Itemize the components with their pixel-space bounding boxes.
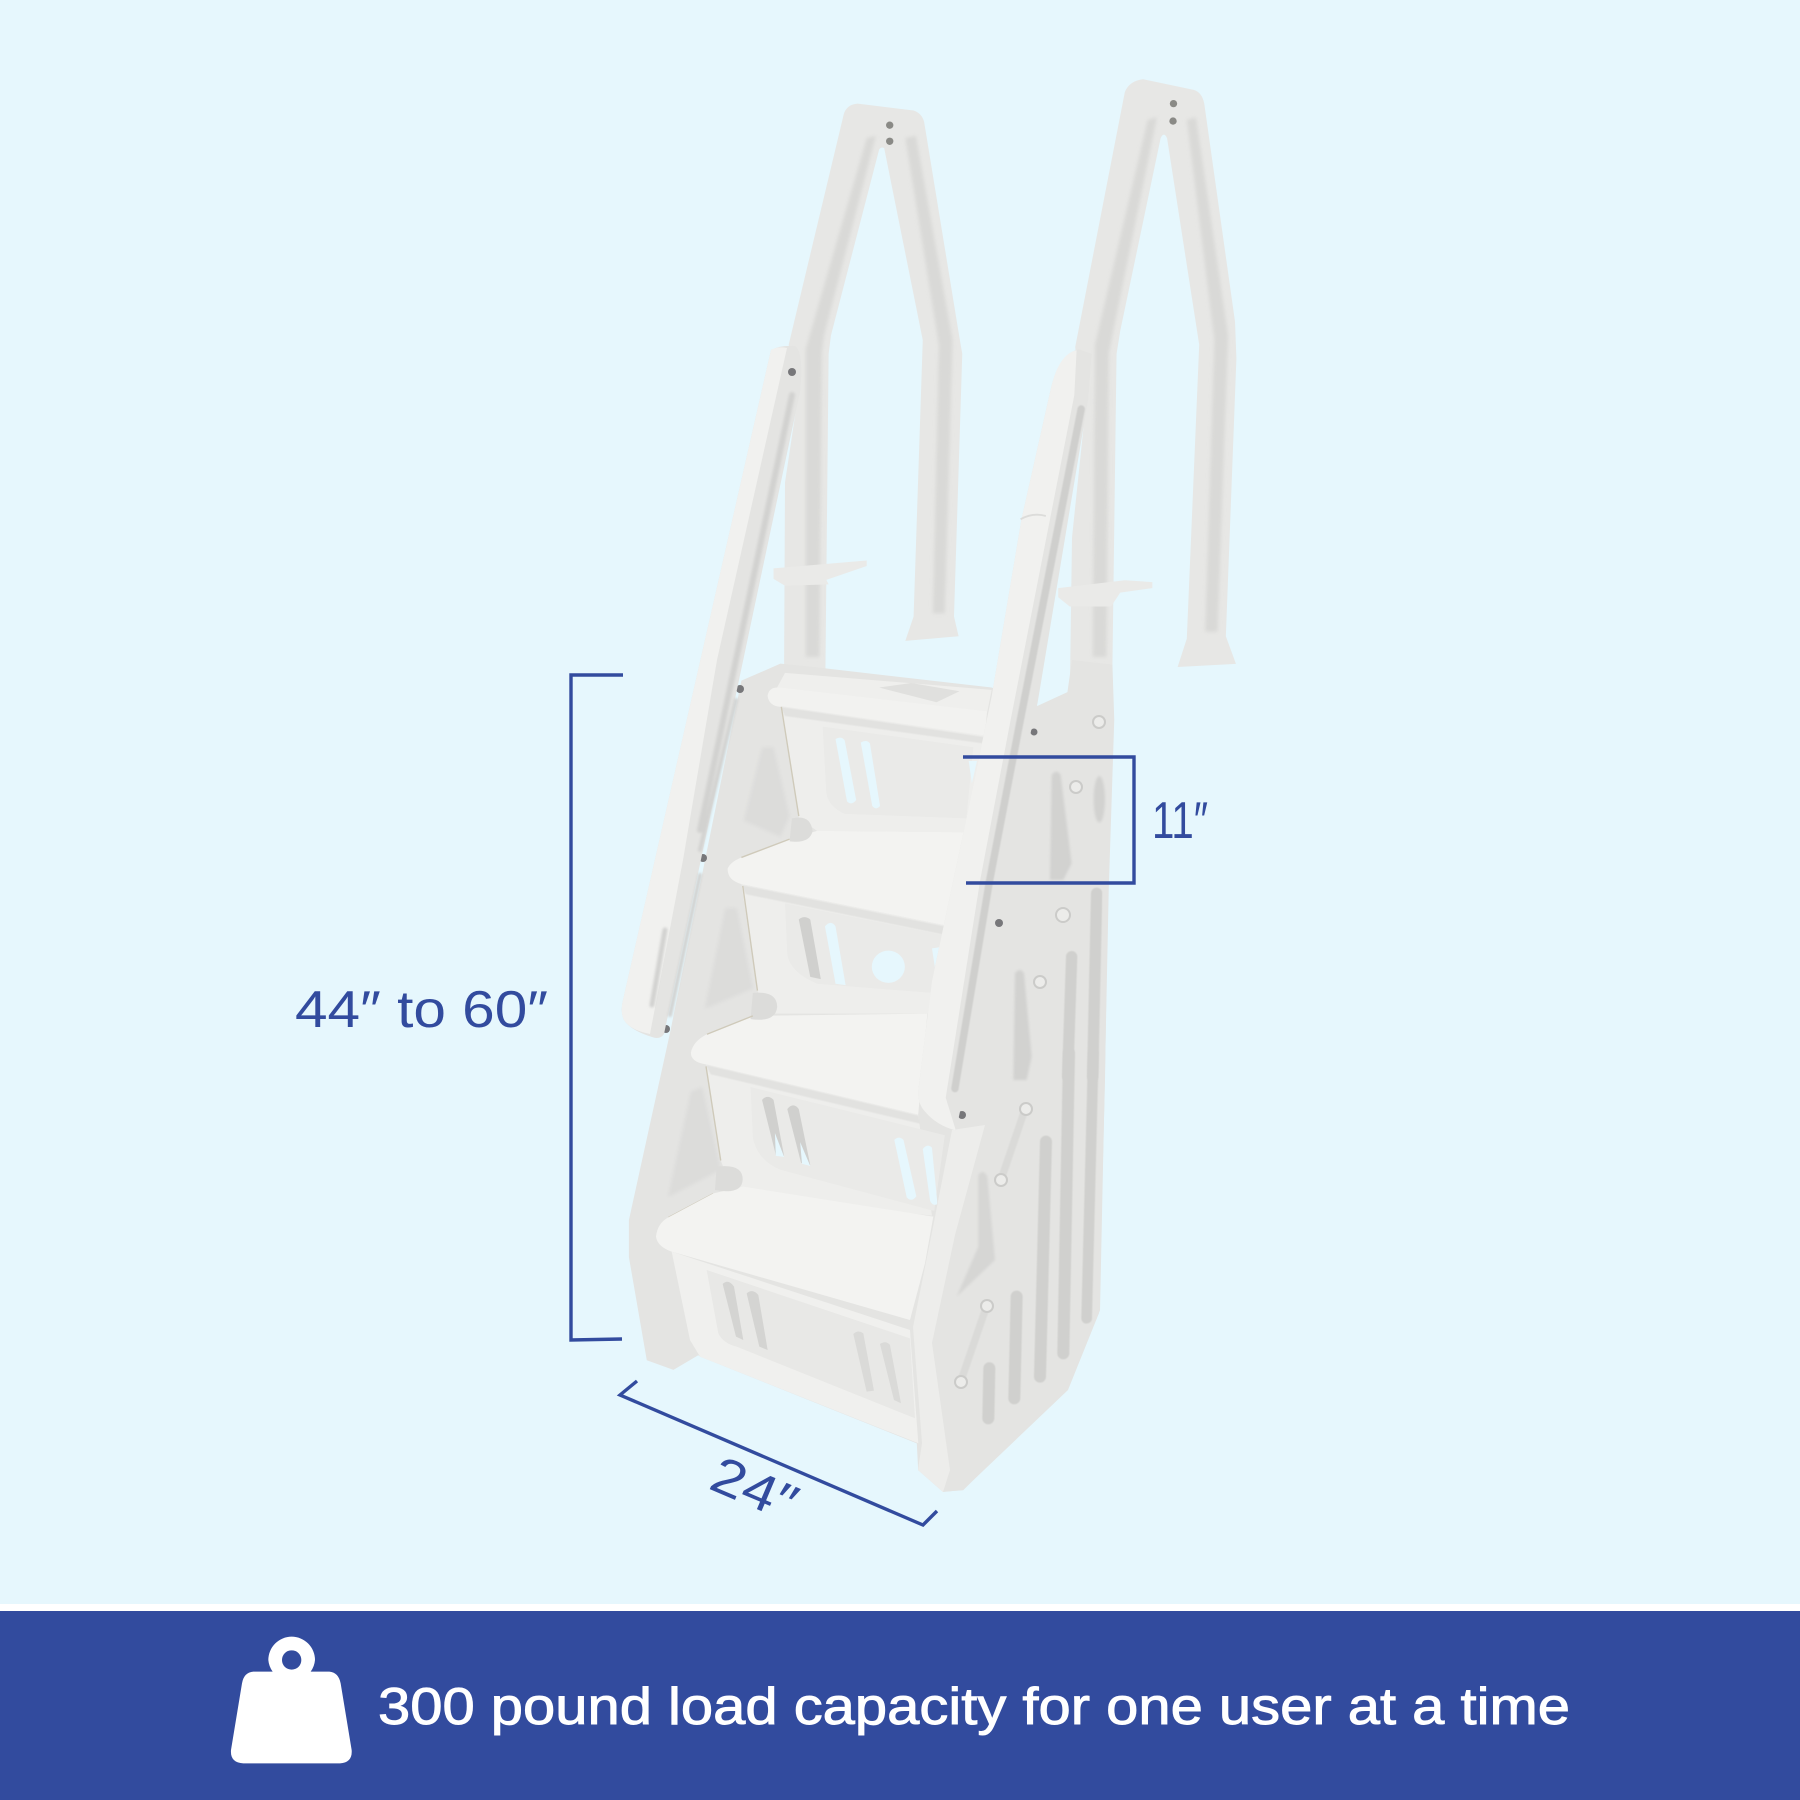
right front handrail — [918, 349, 1092, 1130]
riser 4 — [672, 1252, 918, 1443]
riser 1 — [780, 706, 987, 832]
left panel recesses — [668, 747, 790, 1197]
step block — [629, 660, 1114, 1492]
band background — [0, 1611, 1800, 1800]
lower panel recesses — [957, 1053, 1093, 1418]
step 2 — [728, 831, 964, 926]
rail body — [622, 346, 801, 1038]
right side panel — [662, 680, 1113, 1492]
dimension: overall height — [295, 675, 623, 1340]
knob 3 — [715, 1166, 743, 1191]
left step holder — [774, 561, 867, 586]
block silhouette — [629, 660, 1114, 1492]
icon: weight — [231, 1637, 352, 1763]
white divider — [0, 1604, 1800, 1611]
panel bolts — [955, 716, 1105, 1388]
riser seams — [668, 707, 799, 1217]
panel body — [913, 680, 1113, 1492]
upper panel recesses — [1013, 772, 1105, 1080]
bottom step and riser — [656, 1166, 933, 1443]
top step — [768, 673, 992, 737]
right step holder — [1058, 580, 1152, 606]
footer band — [0, 1611, 1800, 1800]
width label: 24″ — [702, 1446, 806, 1533]
riser 2 — [741, 884, 950, 1014]
left tall rail — [784, 104, 962, 671]
capacity text: 300 pound load capacity for one user at a time — [378, 1678, 1570, 1736]
riser 3 — [706, 1064, 945, 1216]
height bracket — [571, 675, 623, 1340]
left front handrail — [622, 346, 801, 1038]
screws — [662, 685, 1038, 1119]
step 4 tread — [656, 1187, 933, 1320]
rise bracket — [963, 757, 1134, 883]
rail groove — [955, 409, 1081, 1089]
knob 2 — [751, 993, 777, 1020]
rail highlight — [622, 347, 787, 1034]
right tall rail — [1070, 79, 1236, 721]
width bracket — [620, 1381, 937, 1525]
height label: 44″ to 60″ — [295, 981, 548, 1039]
ladder product illustration — [622, 79, 1236, 1492]
rail highlight — [918, 350, 1077, 1130]
dimension: width — [620, 1381, 937, 1533]
back handrails — [774, 79, 1236, 721]
rail grooves — [652, 395, 792, 1015]
rail joint — [1021, 515, 1046, 519]
panel front lip — [913, 1125, 985, 1492]
knob 1 — [790, 817, 813, 842]
dimension: step rise — [963, 757, 1208, 883]
rail body — [918, 349, 1092, 1130]
rail top screw — [788, 368, 796, 376]
step 3 — [691, 1014, 927, 1115]
rise label: 11″ — [1152, 792, 1208, 850]
